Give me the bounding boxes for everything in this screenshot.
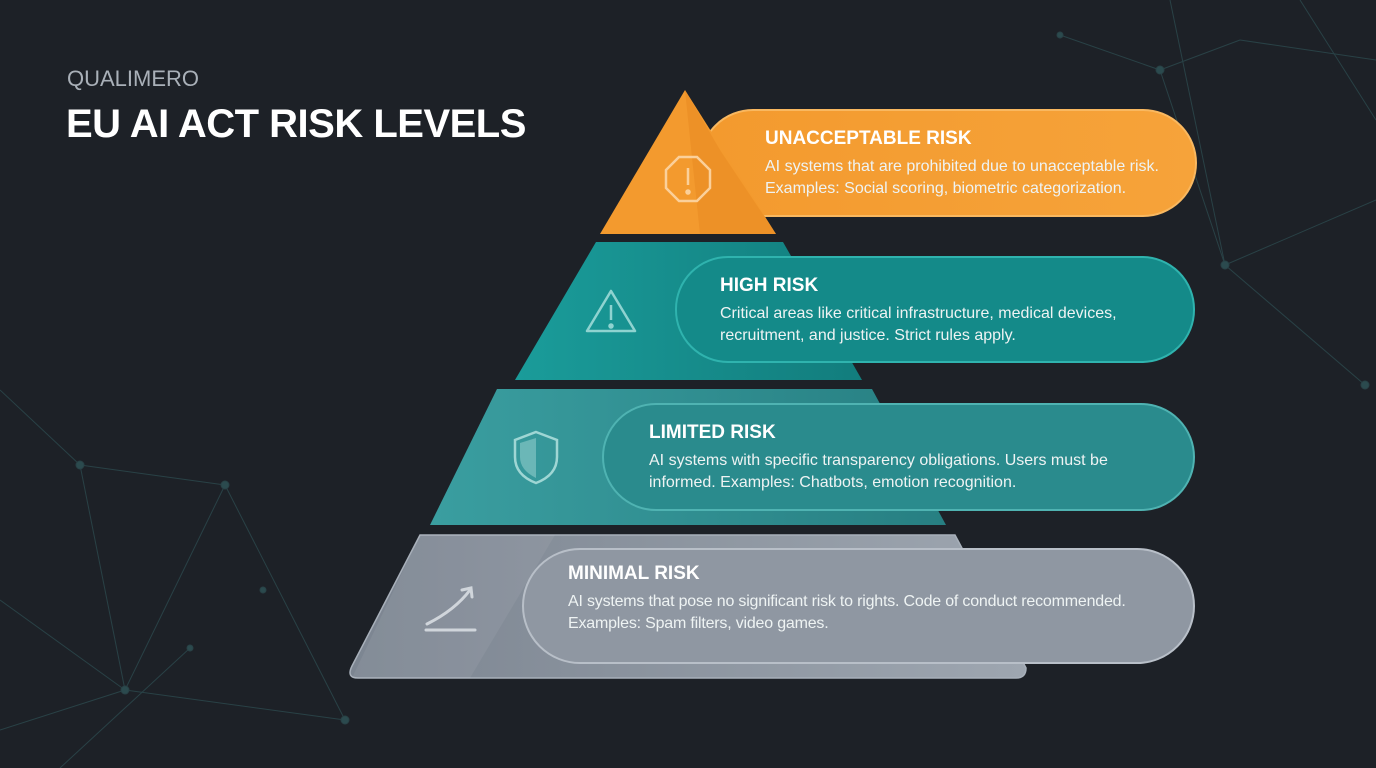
text: high: Critical areas like critical infrastructure, medical devices,: [720, 305, 1117, 322]
text: unacceptable: [765, 128, 1159, 197]
text: high: recruitment, and justice. Strict rules apply.: [720, 327, 1016, 344]
text: high: [720, 275, 1117, 344]
icon: growth curve: [426, 588, 475, 630]
title: EU AI ACT RISK LEVELS: [66, 102, 526, 146]
text: limited: AI systems with specific transparency obligations. Users must be: [649, 452, 1108, 469]
tier 2: high: [515, 242, 1194, 380]
text: limited: LIMITED RISK: [649, 422, 776, 443]
text: unacceptable: UNACCEPTABLE RISK: [765, 128, 972, 149]
text: unacceptable: AI systems that are prohibited due to unacceptable risk.: [765, 158, 1159, 175]
tier 3: limited: [430, 389, 1194, 525]
text: minimal: AI systems that pose no significant risk to rights. Code of conduct recommended.: [568, 593, 1126, 610]
icon: warning triangle: [587, 291, 635, 331]
text: minimal: [568, 563, 1126, 632]
text: unacceptable: Examples: Social scoring, biometric categorization.: [765, 180, 1126, 197]
icon: octagon exclamation: [666, 157, 710, 201]
text: minimal: Examples: Spam filters, video games.: [568, 615, 828, 632]
text: limited: informed. Examples: Chatbots, emotion recognition.: [649, 474, 1016, 491]
text: limited: [649, 422, 1108, 491]
tier 4: minimal: [350, 535, 1194, 678]
text: minimal: MINIMAL RISK: [568, 563, 700, 584]
tier 1: unacceptable: [600, 90, 1196, 234]
brand: QUALIMERO: [67, 66, 199, 91]
icon: shield: [515, 432, 557, 483]
text: high: HIGH RISK: [720, 275, 818, 296]
